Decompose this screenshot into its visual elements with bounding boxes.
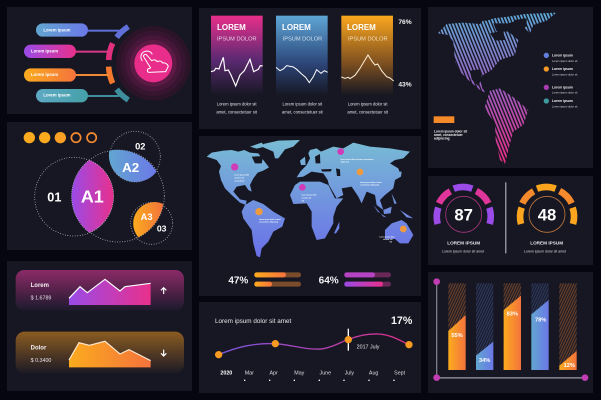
gauge 87 xyxy=(437,187,491,254)
orange note: amet, consectetuer xyxy=(434,133,464,137)
timeline heading: Lorem ipsum dolor sit amet xyxy=(215,318,292,325)
gauge 87: LOREM IPSUM xyxy=(447,241,480,246)
bar 78% xyxy=(531,283,549,370)
map markers xyxy=(231,148,407,232)
dotted circles xyxy=(35,131,173,244)
column: pink xyxy=(211,16,263,114)
segment A3 xyxy=(133,202,167,237)
map gaps xyxy=(252,154,340,176)
map notes: adipiscing xyxy=(341,162,349,164)
bar 78%: 78% xyxy=(535,318,546,324)
segment A2: A2 xyxy=(122,160,139,175)
card: Dolor: $ 0.3400 xyxy=(31,358,51,364)
menu item: purple xyxy=(24,43,113,60)
map notes xyxy=(234,158,395,244)
orange note: Lorem ipsum dolor sit xyxy=(434,129,468,133)
percent labels: 43% xyxy=(398,82,412,89)
menu item: orange xyxy=(24,67,113,83)
column: orange: Lorem ipsum dolor sit xyxy=(348,101,388,106)
stat: 47%: 47% xyxy=(228,275,248,286)
map notes: Lorem ipsum dolor xyxy=(380,236,395,238)
panel: gauges xyxy=(428,176,593,265)
progress dots xyxy=(24,132,96,143)
hatched americas xyxy=(438,13,557,164)
column: pink: IPSUM DOLOR xyxy=(217,37,257,43)
map notes: Lorem ipsum dolor sit amet, consectetuer xyxy=(341,158,374,161)
map notes: sit amet, elit xyxy=(383,238,393,241)
bar 34%: 34% xyxy=(479,358,490,364)
bar 55% xyxy=(448,283,466,370)
segment A1 xyxy=(47,160,114,233)
column: blue: Lorem ipsum dolor sit xyxy=(282,101,323,106)
gauge 48: Lorem ipsum dolor sit amet xyxy=(524,250,566,254)
percent labels xyxy=(398,19,412,89)
segment A1: A1 xyxy=(81,187,104,207)
bar 12% xyxy=(559,283,577,370)
panel: timeline xyxy=(199,302,421,393)
bar 34% xyxy=(476,283,493,370)
segment A1: 01 xyxy=(47,191,61,205)
column: blue: amet, consectetuer sit xyxy=(282,109,323,114)
map notes: consectetuer adipiscing xyxy=(360,184,379,187)
map notes: consectetuer xyxy=(234,179,245,182)
orange note: adipiscing xyxy=(434,137,450,141)
timeline curve: 2017 July xyxy=(357,344,380,350)
menu item: blue: Lorem ipsum xyxy=(43,27,71,32)
map notes: sit amet, elit xyxy=(302,197,312,200)
column: blue xyxy=(276,16,328,114)
timeline curve xyxy=(215,329,413,358)
legend: Lorem ipsum xyxy=(552,67,573,71)
segment A3: A3 xyxy=(141,212,153,222)
map notes: Lorem ipsum dolor xyxy=(302,195,317,197)
map notes: Lorem ipsum dolor sit amet xyxy=(360,181,382,184)
bar 55%: 55% xyxy=(451,333,463,339)
card: Lorem: Lorem xyxy=(31,283,49,289)
column: pink: Lorem ipsum dolor sit xyxy=(217,101,257,106)
month axis: Sept xyxy=(394,371,406,377)
legend: Lorem ipsum xyxy=(552,99,573,103)
gauge 48 xyxy=(520,187,574,254)
month axis: Aug xyxy=(369,371,378,377)
map notes: Lorem ipsum dolor xyxy=(234,174,250,176)
map notes: consectetuer adipiscing xyxy=(259,221,278,224)
column: pink: amet, consectetuer sit xyxy=(216,109,258,114)
panel: venn diagram xyxy=(7,122,192,250)
column: orange xyxy=(341,16,394,114)
bar 83%: 83% xyxy=(507,311,518,317)
month axis xyxy=(220,371,406,381)
column: orange: LOREM xyxy=(347,23,376,32)
segment A2 xyxy=(109,141,157,182)
map notes: Lorem ipsum dolor sit amet xyxy=(259,218,281,221)
world map xyxy=(207,140,413,257)
gauge 48: 48 xyxy=(538,205,556,224)
month axis: Mar xyxy=(245,371,254,377)
segment A2: 02 xyxy=(135,141,146,151)
orange note xyxy=(434,116,468,141)
gauge 87: Lorem ipsum dolor sit amet xyxy=(442,250,484,254)
menu item: teal: Lorem ipsum xyxy=(43,93,71,98)
month axis: May xyxy=(294,371,305,377)
map notes: sit amet, elit xyxy=(234,176,244,179)
gauge divider xyxy=(504,182,507,253)
menu item: teal xyxy=(36,89,128,102)
menu item: purple: Lorem ipsum xyxy=(31,48,58,53)
legend: Lorem ipsum dolor sit xyxy=(552,104,578,108)
column: pink: LOREM xyxy=(217,23,246,32)
legend: Lorem ipsum dolor sit xyxy=(552,59,578,63)
chart axes xyxy=(433,278,588,381)
panel: bar chart xyxy=(428,272,593,393)
panel: price cards xyxy=(7,261,192,391)
panel: world map xyxy=(199,136,421,296)
touch icon with concentric rings xyxy=(116,26,191,101)
legend: Lorem ipsum dolor sit xyxy=(552,91,578,95)
column: blue: IPSUM DOLOR xyxy=(283,37,322,43)
gauge 87: 87 xyxy=(454,205,473,224)
card: Lorem xyxy=(16,270,184,311)
legend xyxy=(544,53,578,108)
month axis: 2020 xyxy=(220,371,232,377)
legend: Lorem ipsum xyxy=(552,53,573,57)
column: blue: LOREM xyxy=(282,23,311,32)
panel: americas map xyxy=(428,7,593,168)
panel: three column line charts xyxy=(199,8,421,129)
legend: Lorem ipsum dolor sit xyxy=(552,73,578,77)
stat: 64%: 64% xyxy=(319,275,339,286)
percent labels: 76% xyxy=(398,19,412,26)
gauge 48: LOREM IPSUM xyxy=(530,241,563,246)
bar 83% xyxy=(504,283,521,370)
segment A3: 03 xyxy=(157,224,167,234)
legend: Lorem ipsum xyxy=(552,85,573,89)
map notes: elit xyxy=(390,241,392,244)
month axis: July xyxy=(345,371,354,377)
map notes: elit xyxy=(302,199,304,202)
month axis: Apr xyxy=(270,371,278,377)
bar 12%: 12% xyxy=(564,363,575,369)
americas gaps xyxy=(470,18,527,86)
stat: 47% xyxy=(228,272,301,287)
card: Dolor: Dolor xyxy=(31,345,47,351)
column: orange: amet, consectetuer sit xyxy=(347,109,389,114)
card: Lorem: $ 1.6789 xyxy=(31,296,51,302)
panel: interactive touch menu xyxy=(7,7,192,114)
menu item: blue xyxy=(36,23,128,37)
stat: 64% xyxy=(319,272,391,287)
column: orange: IPSUM DOLOR xyxy=(348,37,388,43)
month axis: June xyxy=(320,371,331,377)
percent value: 17% xyxy=(391,315,413,327)
card: Dolor xyxy=(16,332,184,373)
menu item: orange: Lorem ipsum xyxy=(31,72,58,77)
